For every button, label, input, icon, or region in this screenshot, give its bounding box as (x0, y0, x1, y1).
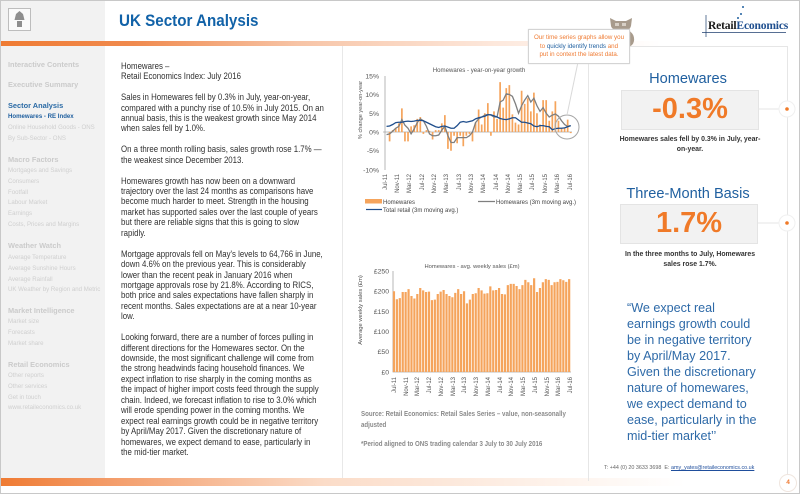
text block: commentary: annual basis, this is the weakest growth since May 2014 (121, 113, 316, 123)
callout: time series note (528, 29, 630, 64)
panel: sidebar navigation: Average Sunshine Hours (8, 265, 76, 272)
description (620, 136, 760, 153)
text block: commentary: by April/May 2017. Given the discretionary nature of (121, 426, 301, 436)
legend: Homewares (383, 200, 415, 206)
value (621, 90, 759, 130)
panel: right summary frame (588, 46, 788, 481)
quote: earnings growth could (627, 317, 750, 331)
top orange band (1, 41, 661, 46)
x axis labels: Mar-12 (415, 376, 421, 396)
page number (779, 474, 797, 492)
y axis title: % change year-on-year (358, 81, 364, 139)
axes (383, 76, 572, 170)
x axis labels (392, 376, 574, 396)
text block: commentary: recent months. Sales expectations are at a near 10-year (121, 301, 316, 311)
x axis labels: Jul-15 (530, 173, 536, 190)
text block: commentary: different directions for the Homewares sector. On the (121, 343, 305, 353)
x axis labels: Jul-13 (462, 376, 468, 393)
text block: commentary: but there are reliable signs that this is going to slow (121, 217, 299, 227)
text block: commentary: the weakest since December 2013. (121, 155, 244, 165)
text block: source note (361, 409, 566, 448)
x axis labels: Nov-14 (506, 173, 512, 193)
sidebar background (1, 1, 105, 478)
text block: commentary: trajectory over the last 24 months as comparisons have (121, 186, 313, 196)
text block: commentary: expect real earnings growth could be in negative territory (121, 416, 318, 426)
y axis title: Average weekly sales (£m) (358, 275, 364, 345)
panel: sidebar navigation: Weather Watch (8, 241, 61, 250)
text block: commentary: low. (121, 311, 135, 321)
panel: sidebar navigation: Retail Economics (8, 360, 70, 369)
text block: commentary: downside, the most significant challenge will come from (121, 353, 314, 363)
y axis labels: 10% (365, 92, 379, 99)
y axis labels: £200 (374, 288, 389, 296)
panel: sidebar navigation: Market Intelligence (8, 306, 75, 315)
y axis labels: £0 (381, 370, 389, 376)
callout: time series note: Our time series graphs allow you (534, 34, 624, 41)
panel: sidebar navigation: Executive Summary (8, 80, 78, 89)
panel: sidebar navigation: Online Household Goods - ONS (8, 124, 95, 131)
panel: sidebar navigation: Costs, Prices and Margins (8, 221, 79, 228)
panel: sidebar navigation: Labour Market (8, 199, 47, 206)
quote: “We expect real (627, 301, 715, 315)
x axis labels: Nov-11 (395, 173, 401, 193)
description: sales rose 1.7%. (663, 261, 717, 268)
x axis labels: Jul-12 (420, 173, 426, 190)
y axis labels: £150 (374, 309, 389, 316)
logo: Retail Economics (702, 6, 788, 37)
panel: sidebar navigation: www.retaileconomics.co.uk (8, 404, 81, 411)
x axis labels: Nov-15 (543, 173, 549, 193)
x axis labels: Mar-12 (407, 173, 413, 193)
text block: commentary: chain. Indeed, we forecast inflation to rise to 3.0% which (121, 395, 316, 405)
y axis labels: £250 (374, 268, 389, 276)
x axis labels: Mar-15 (521, 376, 527, 396)
value (620, 204, 758, 244)
x axis labels: Mar-13 (451, 376, 457, 396)
quote: by April/May 2017. (627, 349, 731, 363)
text block: commentary: Retail Economics Index: July 2016 (121, 71, 241, 81)
text block: source note: Source: Retail Economics: Retail Sales Series – value, non-seasonally (361, 409, 566, 418)
panel: sidebar navigation: Forecasts (8, 329, 35, 336)
callout leader line (567, 62, 578, 115)
quote: mid-tier market’’ (627, 429, 716, 443)
panel: sidebar navigation: Consumers (8, 178, 39, 185)
x axis labels: Nov-11 (404, 376, 410, 396)
quote: ease, particularly in the (627, 413, 757, 427)
text block: commentary: the impact of higher import costs feed through the supply (121, 384, 319, 394)
quote: Given the discretionary (627, 365, 756, 379)
x axis labels: Jul-15 (533, 376, 539, 393)
y axis labels: -5% (367, 148, 379, 155)
chart title: Homewares - year-on-year growth (433, 67, 525, 74)
text block: commentary: mortgage approvals rose by 21.8%. According to RICS, (121, 280, 313, 290)
quote: be in negative territory (627, 333, 752, 347)
text block: commentary: Homewares growth has now been on a downward (121, 176, 295, 186)
text block: commentary: expect inflation to rise sharply in the coming months as (121, 374, 312, 384)
text block: commentary: the mid-tier market. (121, 447, 189, 457)
panel: sidebar navigation: Get in touch (8, 394, 41, 401)
chart: year-on-year growth (358, 67, 576, 214)
panel: sidebar navigation: UK Weather by Region and Metric (8, 286, 100, 293)
text column divider (342, 46, 343, 478)
orange bars (390, 82, 571, 151)
heading: Three-Month Basis (626, 186, 750, 202)
y axis labels: 0% (369, 130, 379, 136)
text block: commentary: the strong headwinds facing household finances. We (121, 363, 305, 373)
orange bars (394, 278, 569, 372)
panel: sidebar navigation (8, 60, 100, 411)
text block: commentary: market has supported sales over the last couple of years (121, 207, 318, 217)
text block: commentary: become much harder to meet. Strength in the housing (121, 196, 309, 206)
text block: commentary: when sales fell by 1.0%. (121, 123, 205, 133)
panel: sidebar navigation: Homewares - RE Index (8, 113, 74, 120)
text block: commentary: Mortgage approvals fell on May's levels to 64,766 in June, (121, 249, 323, 259)
text block: commentary: rapidly. (121, 228, 146, 238)
panel: three-month KPI (620, 186, 758, 268)
panel: sidebar navigation: Earnings (8, 210, 32, 217)
y axis labels: -10% (363, 168, 379, 174)
panel: sidebar navigation: Average Rainfall (8, 276, 53, 283)
description: Homewares sales fell by 0.3% in July, year- (620, 136, 760, 143)
x axis labels: Mar-14 (486, 376, 492, 396)
heading: Homewares (649, 71, 727, 87)
callout highlight circle (555, 115, 579, 139)
y axis labels: 15% (365, 74, 379, 80)
panel: sidebar navigation: Average Temperature (8, 254, 66, 261)
x axis labels: Nov-13 (474, 376, 480, 396)
panel: sidebar navigation: Macro Factors (8, 155, 59, 164)
value: 1.7% (656, 207, 722, 239)
panel: Homewares KPI (620, 71, 760, 153)
description (625, 250, 755, 268)
legend: Homewares (3m moving avg.) (496, 200, 576, 206)
quote (627, 301, 757, 443)
chart: average weekly sales (358, 264, 574, 396)
icon: home button (8, 8, 31, 31)
text block: source note: adjusted *Period aligned to ONS trading calendar 3 July to 30 July 2016 (361, 420, 542, 448)
panel: sidebar navigation: Other services (8, 383, 47, 390)
text block: commentary (121, 61, 324, 457)
charts (358, 64, 580, 396)
gray 3m moving average line (387, 94, 571, 142)
y axis labels: £50 (378, 349, 389, 356)
page number: 4 (786, 479, 790, 486)
title: UK Sector Analysis (119, 12, 258, 30)
logo: Retail Economics: RetailEconomics (708, 19, 788, 32)
x axis labels: Nov-12 (439, 376, 445, 396)
x axis labels: Jul-16 (568, 376, 574, 393)
x axis labels: Mar-13 (444, 173, 450, 193)
connector: three-month marker (758, 214, 796, 232)
text block: commentary: lower than the recent peak in January 2016 when (121, 270, 292, 280)
icon: owl (610, 18, 634, 46)
panel: sidebar navigation: Mortgages and Savings (8, 167, 72, 174)
text block: commentary: will erode spending power in the coming months. We (121, 405, 305, 415)
contact details: T: +44 (0) 20 3633 3698 E: amy_yates@retaileconomics.co.uk (604, 465, 754, 471)
callout: time series note: to quickly identify trends and (540, 42, 618, 50)
callout: time series note: put in context the latest data. (539, 51, 619, 58)
text block: commentary: compared with a punchy rise of 10.5% in July 2015. On an (121, 103, 324, 113)
x axis labels: Nov-12 (432, 173, 438, 193)
y axis labels (374, 268, 389, 376)
x axis labels: Mar-14 (481, 173, 487, 193)
panel: sidebar navigation: Other reports (8, 372, 44, 379)
text block: commentary: both price and sales expectations have fallen sharply in (121, 290, 313, 300)
quote: we expect demand to (627, 397, 747, 411)
x axis labels: Jul-13 (457, 173, 463, 190)
panel: sidebar navigation: By Sub-Sector - ONS (8, 135, 66, 142)
bottom orange band (1, 478, 721, 486)
quote: nature of homewares, (627, 381, 749, 395)
x axis labels: Nov-14 (509, 376, 515, 396)
text block: commentary: homewares, we expect demand to ease, particularly in (121, 437, 310, 447)
connector: Homewares marker (759, 100, 796, 118)
description: on-year. (677, 146, 703, 153)
panel: sidebar navigation: Market size (8, 318, 39, 325)
x axis labels: Nov-13 (469, 173, 475, 193)
x axis labels: Mar-16 (555, 173, 561, 193)
text block: commentary: On a three month rolling basis, sales growth rose 1.7% — (121, 144, 322, 154)
x axis labels: Jul-16 (568, 173, 574, 190)
text block: commentary: Homewares – (121, 61, 169, 71)
x axis labels: Jul-11 (392, 376, 398, 393)
value: -0.3% (652, 93, 728, 125)
blue total retail line (387, 115, 571, 130)
x axis labels: Mar-15 (518, 173, 524, 193)
legend: Total retail (3m moving avg.) (383, 208, 458, 214)
text block: commentary: down 4.6% on the previous year. This is considerably (121, 259, 306, 269)
text block: commentary: Sales in Homewares fell by 0.3% in July, year-on-year, (121, 92, 310, 102)
x axis labels: Jul-11 (383, 173, 389, 190)
panel: sidebar navigation: Market share (8, 340, 44, 347)
x axis labels: Nov-15 (545, 376, 551, 396)
text block: commentary: Looking forward, there are a number of forces pulling in (121, 332, 313, 342)
x axis labels (383, 173, 574, 193)
panel: sidebar navigation: Interactive Contents (8, 60, 79, 69)
description: In the three months to July, Homewares (625, 251, 755, 258)
panel: sidebar navigation: Footfall (8, 189, 28, 196)
panel: sidebar navigation: Sector Analysis (8, 101, 63, 110)
y axis labels: 5% (369, 111, 379, 118)
chart title: Homewares - avg. weekly sales (£m) (424, 264, 520, 270)
x axis labels: Mar-16 (556, 376, 562, 396)
x axis labels: Jul-14 (494, 173, 500, 190)
axes (393, 271, 571, 372)
x axis labels: Jul-14 (498, 376, 504, 393)
legend (365, 199, 576, 214)
x axis labels: Jul-12 (427, 376, 433, 393)
y axis labels (363, 74, 379, 174)
y axis labels: £100 (374, 329, 389, 336)
